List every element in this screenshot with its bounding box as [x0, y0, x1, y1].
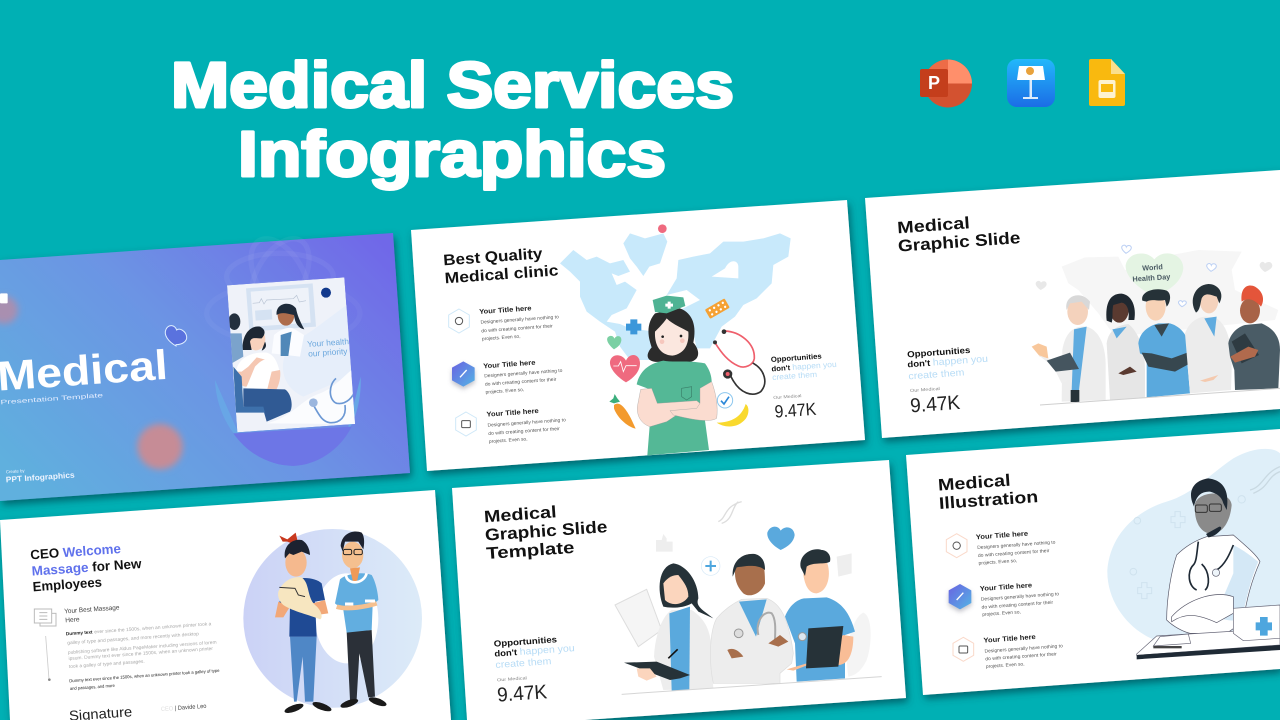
slide heading: Graphic Slide	[897, 228, 1021, 256]
panel: medical graphic slide template with three doctors	[452, 460, 906, 720]
faint crosses	[1130, 496, 1245, 599]
icon: pill pack	[705, 298, 730, 319]
man with tooth	[275, 533, 333, 715]
blurred corner circle	[0, 296, 18, 324]
feature 3: do with creating content for their	[488, 426, 560, 436]
slide heading: Best Quality	[443, 245, 544, 269]
feature 1: Designers generally have nothing to	[977, 540, 1056, 550]
feature 3: projects. Even so,	[986, 661, 1025, 669]
female doctor	[624, 563, 713, 691]
hexagon icon	[949, 584, 971, 609]
slide heading: Illustration	[938, 487, 1039, 513]
icon: white case	[0, 293, 8, 303]
doctor 3	[1138, 289, 1190, 397]
slide background	[906, 429, 1280, 695]
slide heading: CEO Welcome	[30, 541, 121, 562]
slide heading	[30, 541, 143, 594]
quote and stat: create them	[495, 656, 552, 671]
feature 1: Your Title here	[479, 305, 532, 316]
message body: Dummy text	[66, 629, 93, 636]
icon: speech bubbles	[34, 609, 56, 626]
feature 2	[949, 582, 1060, 617]
nurse uniform	[637, 361, 712, 455]
icon: stethoscope	[715, 331, 765, 394]
feature 1	[449, 305, 559, 341]
atom orbit decoration	[207, 229, 360, 343]
feature 1: do with creating content for their	[481, 323, 553, 333]
panel: medical illustration slide	[906, 429, 1280, 695]
faint DNA	[1250, 467, 1280, 493]
picture card	[227, 277, 357, 432]
notepad	[1153, 634, 1191, 648]
man with glasses	[335, 532, 388, 710]
message body: and passages, and more	[70, 683, 116, 691]
floating hearts	[1036, 245, 1272, 307]
icon: red heart with pulse	[610, 355, 640, 382]
plus badge	[701, 557, 720, 575]
slide heading	[483, 502, 608, 563]
nurse face	[655, 318, 688, 356]
message body: galley of type and passages, and more recently with desktop	[67, 631, 200, 645]
cover subtitle: Presentation Template	[0, 392, 104, 406]
hexagon icon	[946, 534, 967, 558]
world map	[560, 233, 791, 360]
faint bottle	[837, 553, 852, 577]
feature 2	[452, 360, 563, 395]
credit: PPT Infographics	[6, 470, 76, 484]
feature 2: projects. Even so,	[982, 609, 1021, 617]
title: Medical Services	[171, 49, 734, 121]
slide heading: Template	[486, 538, 575, 563]
doctor 1	[1032, 295, 1106, 402]
medical box	[1233, 605, 1280, 641]
message body: Your Best Massage	[64, 604, 120, 615]
feature 3: Designers generally have nothing to	[984, 643, 1063, 654]
panel: purple cover slide	[0, 229, 410, 501]
doctor figure	[272, 328, 304, 357]
desk	[1137, 628, 1280, 655]
panel: CEO welcome message slide	[0, 490, 451, 720]
hexagon icon	[953, 637, 974, 661]
slide background	[865, 170, 1280, 438]
faint DNA	[718, 502, 742, 523]
quote and stat: Our Medical	[497, 675, 527, 682]
feature 3: Designers generally have nothing to	[487, 417, 566, 428]
feature 2: Your Title here	[980, 582, 1032, 593]
quote and stat: 9.47K	[909, 392, 962, 417]
quote and stat: Opportunities	[493, 634, 558, 649]
feature 3: projects. Even so,	[489, 436, 528, 444]
quote and stat: create them	[772, 370, 818, 382]
signature	[68, 703, 207, 720]
quote and stat: Opportunities	[907, 345, 971, 359]
panel: medical graphic slide with five doctors	[865, 170, 1280, 438]
nurse hair	[648, 308, 698, 362]
panel: best quality medical clinic slide	[411, 200, 865, 471]
quote and stat: Opportunities	[771, 351, 822, 364]
stethoscope	[313, 378, 355, 423]
World Health Day heart: Health Day	[1132, 272, 1172, 284]
quote and stat	[771, 351, 837, 422]
timeline line	[46, 636, 51, 681]
slide heading: Massage for New	[31, 556, 143, 579]
icon: check badge	[717, 393, 733, 408]
blue blob	[1107, 449, 1280, 639]
stethoscope	[1189, 542, 1233, 590]
cover title: Medical	[0, 341, 169, 400]
feature 3: Your Title here	[983, 634, 1036, 645]
faint leaf	[847, 613, 871, 677]
World Health Day heart	[1126, 253, 1183, 297]
app icons	[920, 59, 1125, 108]
quote and stat: Our Medical	[910, 386, 940, 393]
message body	[64, 604, 220, 691]
quote and stat: don't happen you	[494, 643, 575, 660]
icon: Keynote	[1007, 59, 1055, 107]
hexagon icon	[449, 309, 469, 333]
quote and stat: create them	[908, 367, 965, 382]
title	[171, 49, 734, 190]
ground line	[622, 677, 882, 694]
slide heading: Medical	[897, 213, 970, 237]
message body: ever since the 1500s, when an unknown printer took a	[94, 621, 212, 634]
picture slogan: Your health	[307, 336, 350, 349]
nurse figure	[637, 296, 717, 455]
patient figure	[236, 353, 279, 388]
red location dot	[658, 224, 667, 233]
slide heading	[443, 245, 560, 287]
slide heading: Medical	[483, 502, 557, 526]
feature 3: Your Title here	[486, 408, 539, 419]
message body: Dummy text ever since the 1500s, when an unknown printer took a galley of type	[69, 668, 220, 683]
title: Infographics	[238, 118, 666, 190]
slide heading: Medical	[937, 471, 1011, 495]
slide heading: Medical clinic	[444, 262, 560, 287]
quote and stat: 9.47K	[774, 399, 817, 422]
feature 3	[456, 408, 566, 444]
donut backdrop	[243, 529, 422, 708]
blue heart	[767, 527, 795, 550]
feature 2: Your Title here	[483, 360, 536, 370]
feature 1: projects. Even so,	[978, 558, 1017, 566]
faint clipboard	[615, 589, 662, 647]
ground line	[1040, 388, 1280, 405]
feature 1: projects. Even so,	[482, 334, 521, 341]
feature 2: do with creating content for their	[981, 600, 1054, 610]
slide background	[0, 233, 410, 501]
doctor 5	[1228, 285, 1280, 390]
feature 1: Your Title here	[976, 531, 1028, 541]
feature 2: Designers generally have nothing to	[981, 591, 1060, 602]
quote and stat: don't happen you	[907, 354, 988, 370]
doctor 2	[1106, 294, 1145, 400]
slide heading	[937, 471, 1039, 513]
quote and stat	[493, 634, 575, 707]
slide background	[411, 200, 865, 471]
feature 3: do with creating content for their	[985, 651, 1057, 661]
feature 2: Designers generally have nothing to	[484, 368, 563, 378]
feature 3	[953, 634, 1063, 669]
feature 1: do with creating content for their	[978, 548, 1050, 558]
blurred coral circle	[137, 424, 183, 469]
credit: Create by	[6, 468, 26, 474]
hexagon icon	[456, 412, 476, 436]
icon: Google Slides	[1089, 59, 1125, 106]
slide heading	[897, 213, 1021, 256]
icon: heart badge	[165, 326, 187, 346]
bowl shape behind picture	[215, 377, 361, 466]
quote and stat: 9.47K	[496, 681, 549, 707]
icon: green heart	[607, 336, 621, 349]
faint world map	[1062, 250, 1278, 337]
faint thumbs up	[656, 534, 673, 552]
picture slogan: our priority	[308, 346, 349, 359]
slide background	[452, 460, 906, 720]
feature 1	[946, 531, 1056, 566]
doctor coat	[1167, 535, 1260, 633]
hexagon icon	[452, 361, 475, 387]
doctor head	[1195, 494, 1232, 534]
signature: CEO | Davide Leo	[161, 704, 207, 713]
feature 2: projects. Even so,	[485, 387, 524, 395]
icon: banana	[717, 404, 748, 426]
nurse crossed arms	[637, 388, 704, 427]
message body: took a galley of type and passages.	[69, 659, 145, 669]
quote and stat	[907, 345, 988, 417]
quote and stat: Our Medical	[773, 393, 802, 400]
World Health Day heart: World	[1142, 262, 1163, 273]
icon: PowerPoint: P	[928, 73, 940, 93]
feature 1: Designers generally have nothing to	[480, 314, 559, 325]
right male doctor	[785, 549, 855, 682]
icon: blue cross	[626, 319, 641, 334]
quote and stat: don't happen you	[771, 360, 837, 373]
message body: ipsum. Dummy text ever since the 1500s, when an unknown printer	[68, 646, 214, 661]
picture slogan	[307, 338, 349, 358]
slide heading: Graphic Slide	[484, 517, 608, 545]
icon: PowerPoint	[920, 60, 972, 108]
icon: carrot	[609, 394, 636, 429]
message body: publishing software like Aldus PageMaker including versions of lorem	[68, 640, 217, 655]
central male doctor	[710, 554, 793, 683]
message body: Here	[65, 616, 80, 624]
slide background	[0, 490, 451, 720]
nurse cap	[653, 296, 685, 313]
feature 2: do with creating content for their	[485, 377, 557, 387]
slide heading: Employees	[32, 575, 102, 594]
doctor 4	[1185, 284, 1232, 393]
